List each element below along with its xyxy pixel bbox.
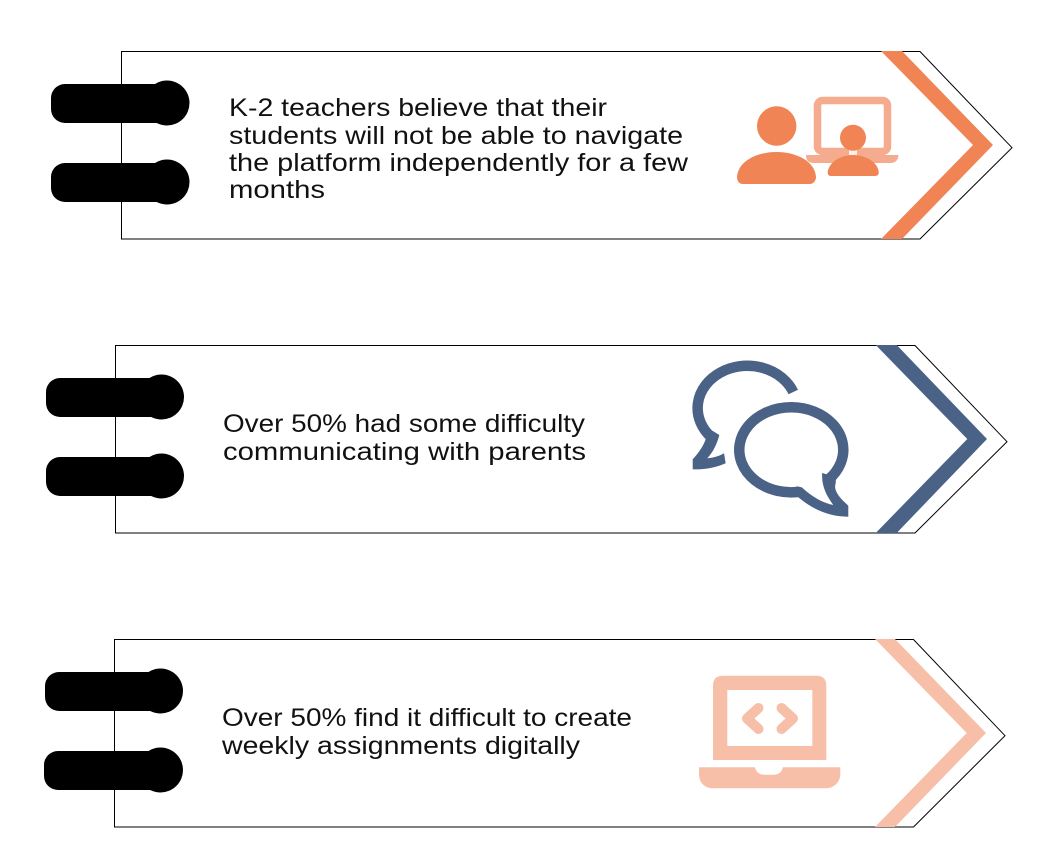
binder tabs bbox=[46, 374, 184, 498]
text block: communicating with parents bbox=[223, 438, 586, 466]
text block bbox=[229, 94, 689, 204]
text block: Over 50% had some difficulty bbox=[223, 410, 586, 438]
arrow card outline bbox=[116, 346, 1007, 533]
text block: months bbox=[229, 176, 325, 204]
chevron accent bbox=[876, 345, 987, 533]
arrow card outline bbox=[122, 52, 1012, 239]
text block bbox=[221, 704, 632, 760]
panel: parent communication bbox=[46, 345, 1007, 533]
binder tabs bbox=[44, 668, 183, 792]
text block: students will not be able to navigate bbox=[229, 122, 683, 150]
text block: Over 50% find it difficult to create bbox=[222, 704, 632, 732]
panel: digital assignments bbox=[44, 639, 1005, 827]
text block: K-2 teachers believe that their bbox=[229, 94, 607, 122]
icon: laptop with code bbox=[699, 676, 840, 788]
text block: the platform independently for a few bbox=[229, 149, 689, 177]
text block bbox=[223, 410, 586, 466]
text block: weekly assignments digitally bbox=[221, 732, 581, 760]
icon: teacher and student on laptop bbox=[737, 100, 898, 184]
icon: speech bubbles bbox=[693, 366, 848, 517]
chevron accent bbox=[881, 51, 993, 239]
arrow card outline bbox=[114, 640, 1005, 827]
panel: K-2 navigation bbox=[51, 51, 1012, 239]
chevron accent bbox=[875, 639, 986, 827]
binder tabs bbox=[51, 80, 190, 204]
